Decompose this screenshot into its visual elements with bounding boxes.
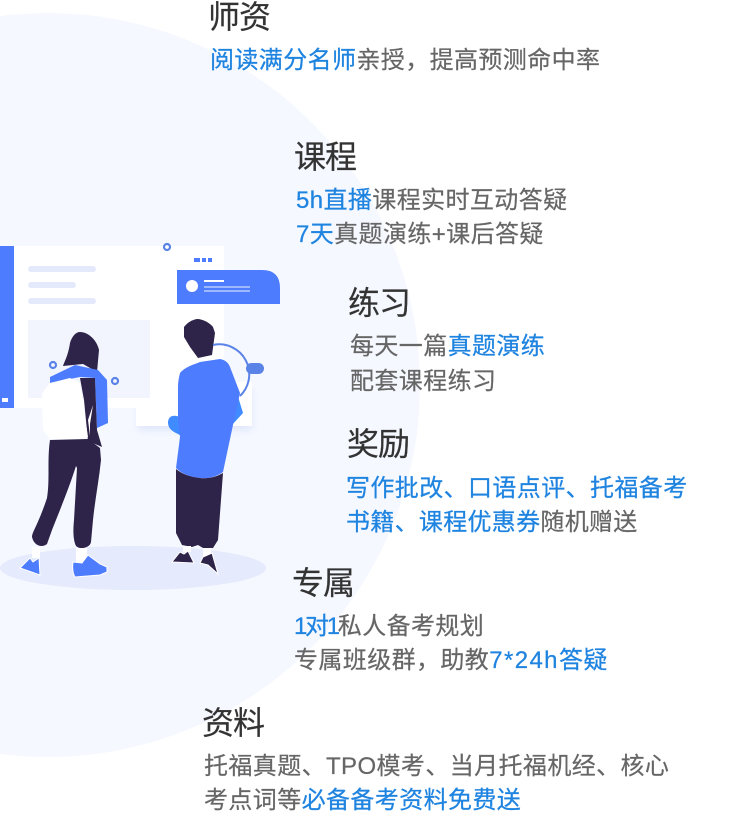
background circle — [0, 13, 420, 757]
heading: 专属: 专属 — [292, 565, 354, 601]
text: 练习 line 1: 每天一篇真题演练 — [350, 333, 545, 360]
section: 专属 — [292, 565, 608, 674]
text: 课程 line 1: 5h直播课程实时互动答疑 — [296, 187, 568, 214]
section: 资料 — [202, 705, 669, 814]
person: woman with backpack — [20, 332, 108, 577]
text: 资料 line 2: 考点词等必备备考资料免费送 — [204, 787, 521, 814]
heading: 奖励: 奖励 — [347, 426, 409, 462]
heading: 练习: 练习 — [348, 285, 410, 321]
text: 奖励 line 2: 书籍、课程优惠券随机赠送 — [346, 509, 638, 536]
floating white card — [136, 382, 252, 430]
text: 课程 line 2: 7天真题演练+课后答疑 — [296, 221, 544, 248]
text: 奖励 line 1: 写作批改、口语点评、托福备考 — [346, 475, 688, 502]
section: 课程 — [294, 139, 568, 248]
person: man in blue sweater — [168, 319, 264, 574]
ground shadow — [0, 546, 266, 590]
browser window — [0, 246, 224, 426]
text: 练习 line 2: 配套课程练习 — [350, 368, 496, 395]
text: 专属 line 2: 专属班级群，助教7*24h答疑 — [294, 647, 608, 674]
text: 师资 description: 阅读满分名师亲授，提高预测命中率 — [210, 47, 600, 74]
chat bubble — [177, 258, 280, 304]
text: 专属 line 1: 1对1私人备考规划 — [294, 613, 484, 640]
section: 练习 — [348, 285, 545, 395]
text: 资料 line 1: 托福真题、TPO模考、当月托福机经、核心 — [204, 753, 669, 780]
section: 师资 — [208, 0, 600, 74]
small ring decorations — [50, 244, 170, 384]
heading: 资料: 资料 — [202, 705, 264, 741]
section: 奖励 — [346, 426, 688, 536]
heading: 课程: 课程 — [294, 139, 356, 175]
heading: 师资: 师资 — [208, 0, 270, 35]
